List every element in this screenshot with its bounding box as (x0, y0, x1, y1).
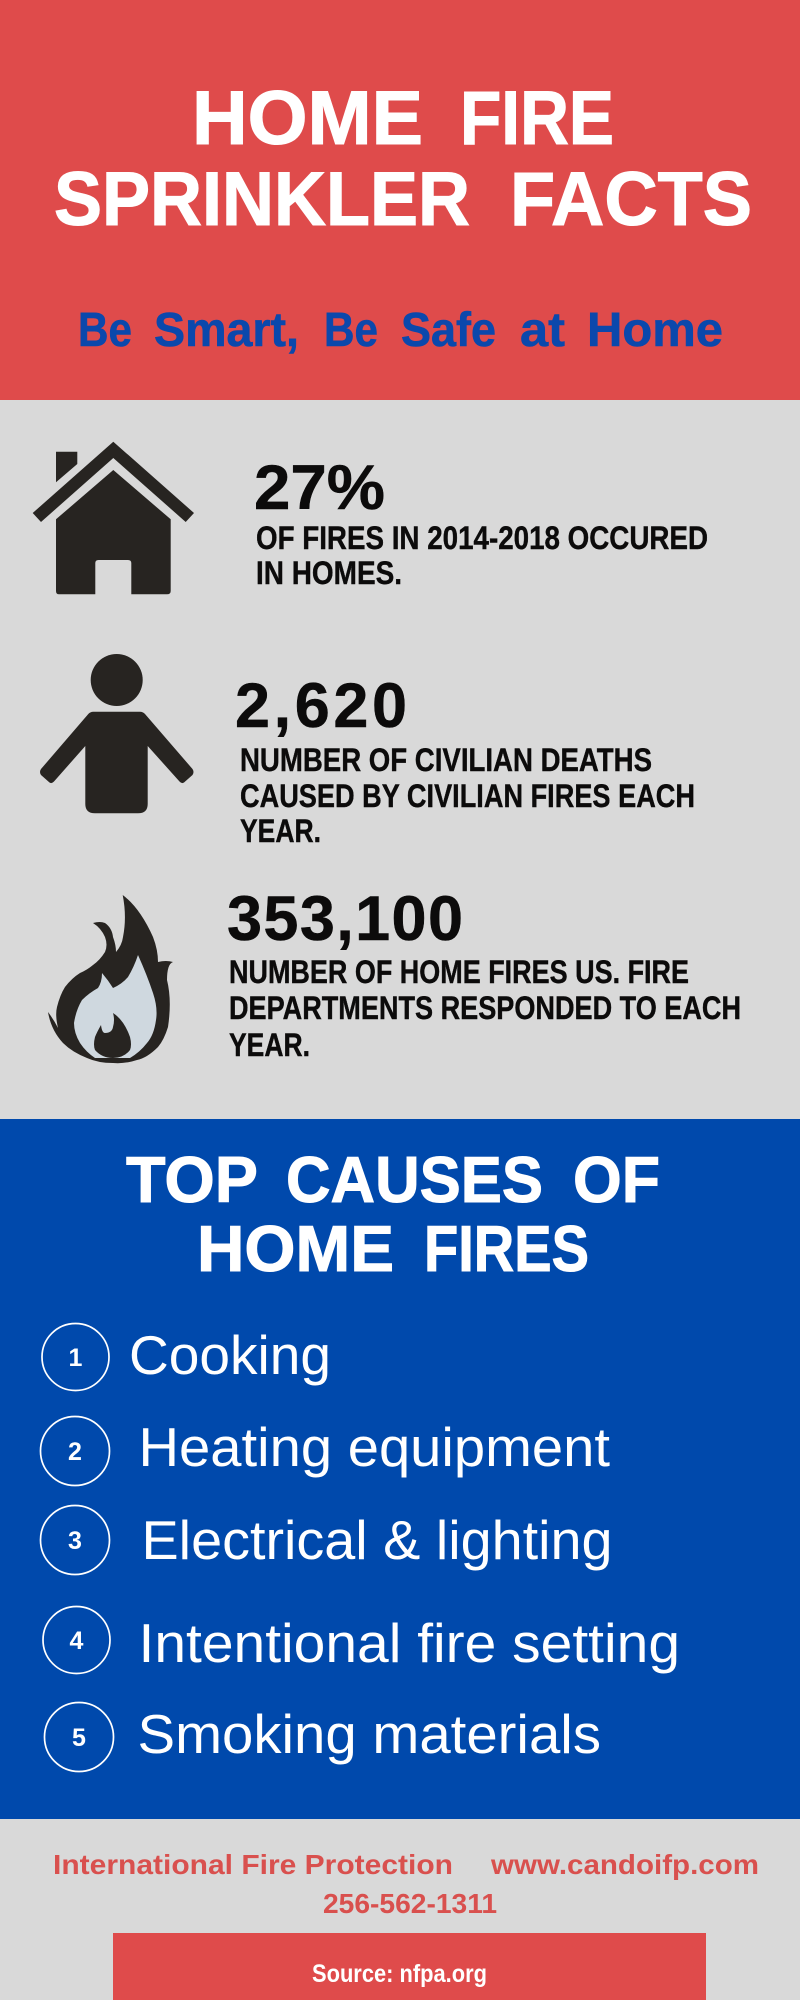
heading: top causes of home fires: HOME (197, 1212, 394, 1285)
title: FACTS (510, 157, 752, 242)
stat: 27%: IN HOMES. (256, 555, 402, 591)
title: SPRINKLER (54, 157, 470, 242)
icon: person (40, 654, 194, 813)
panel: statistics (0, 400, 800, 1119)
stat: 353,100: 353,100 (227, 884, 463, 954)
stat: 27% (254, 453, 708, 591)
list item 5: 5 (72, 1724, 86, 1752)
source bar (113, 1933, 706, 2000)
list item 5: Smoking materials (138, 1703, 601, 1765)
list item 4: Intentional fire setting (138, 1612, 680, 1674)
subtitle: Be (78, 304, 132, 357)
heading: top causes of home fires: OF (573, 1143, 660, 1216)
subtitle: at (520, 304, 565, 357)
stat: 353,100 (227, 884, 741, 1063)
contact: phone: 256-562-1311 (323, 1888, 497, 1919)
stat: 2,620 (235, 671, 695, 849)
heading: top causes of home fires: TOP (126, 1143, 258, 1216)
contact: website: www.candoifp.com (490, 1849, 759, 1880)
stat: 2,620: 2,620 (235, 671, 407, 741)
list item 1: 1 (69, 1344, 83, 1372)
stat: 27%: 27% (254, 453, 385, 523)
heading: top causes of home fires: CAUSES (286, 1143, 543, 1216)
list item 2: Heating equipment (138, 1416, 610, 1478)
title: FIRE (460, 76, 614, 161)
subtitle: Safe (401, 304, 496, 357)
list item 3: 3 (68, 1527, 82, 1555)
subtitle: Smart, (154, 304, 299, 357)
stat: 2,620: NUMBER OF CIVILIAN DEATHS (240, 742, 652, 778)
stat: 2,620: CAUSED BY CIVILIAN FIRES EACH (240, 778, 695, 814)
subtitle (78, 304, 723, 357)
list item 1 (42, 1324, 331, 1390)
source bar: Source: nfpa.org (312, 1960, 487, 1988)
heading: top causes of home fires: FIRES (424, 1212, 589, 1285)
subtitle: Be (324, 304, 378, 357)
stat: 353,100: NUMBER OF HOME FIRES US. FIRE (229, 954, 689, 990)
list item 2: 2 (68, 1438, 82, 1466)
title: HOME (192, 76, 423, 161)
list item 1: Cooking (129, 1324, 331, 1386)
heading: top causes of home fires (126, 1143, 660, 1285)
panel: footer (0, 1819, 800, 2000)
title (54, 76, 752, 242)
stat: 27%: OF FIRES IN 2014-2018 OCCURED (256, 520, 708, 556)
list item 3: Electrical & lighting (142, 1509, 612, 1571)
contact: company name: International Fire Protection (53, 1849, 453, 1880)
icon: flame (48, 895, 173, 1063)
list item 4: 4 (70, 1627, 84, 1655)
panel: header (0, 0, 800, 400)
stat: 353,100: YEAR. (229, 1027, 310, 1063)
icon: house (33, 442, 194, 594)
panel: top causes (0, 1119, 800, 1819)
subtitle: Home (587, 304, 723, 357)
stat: 2,620: YEAR. (240, 813, 321, 849)
